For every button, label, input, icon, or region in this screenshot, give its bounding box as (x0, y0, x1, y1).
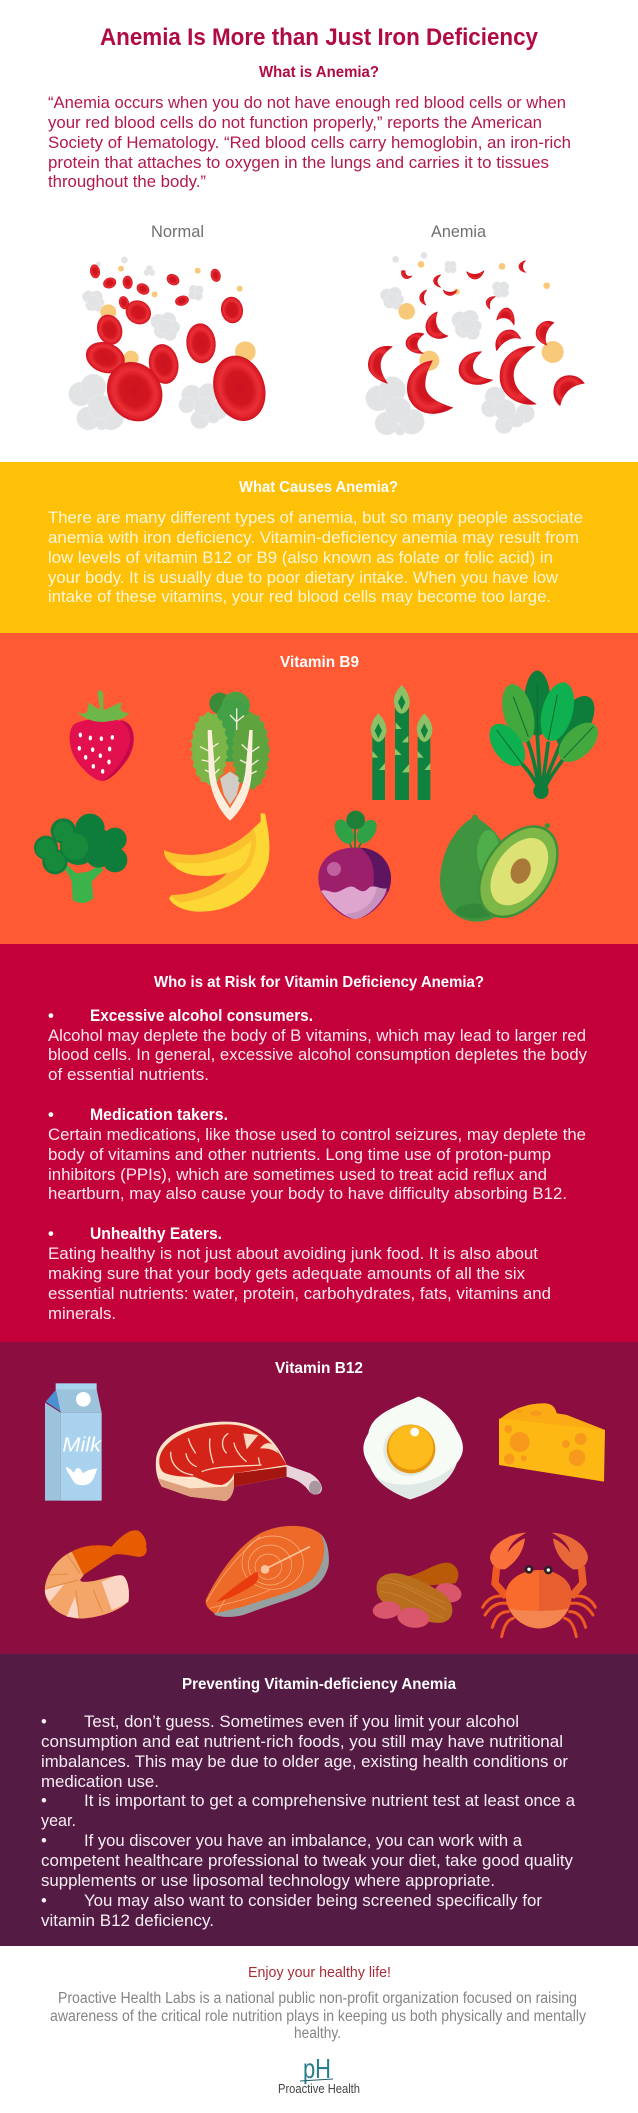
illustration: anemia sickle cells (366, 252, 584, 435)
icon: beet (318, 811, 391, 919)
text block: anemia definition (48, 94, 571, 191)
panel: vitamin B9 foods (0, 633, 638, 944)
text block: medication takers: • (48, 1106, 54, 1124)
text block: excessive alcohol consumers: blood cells. In general, excessive alcohol consumption depletes the body (48, 1046, 588, 1064)
panel: who is at risk (0, 944, 638, 1342)
text block: prevention tips: Test, don’t guess. Sometimes even if you limit your alcohol (84, 1713, 519, 1731)
text block: prevention tips: consumption and eat nutrient-rich foods, you still may have nutritional (41, 1733, 563, 1751)
text block: anemia definition: protein that attaches to oxygen in the lungs and carries it to tissues (48, 154, 549, 172)
text block: unhealthy eaters: essential nutrients: water, protein, carbohydrates, fats, vitamins and (48, 1285, 551, 1303)
text block: anemia definition: Society of Hematology. “Red blood cells carry hemoglobin, an iron-rich (48, 134, 571, 152)
icon: cheese (499, 1403, 605, 1482)
text block: medication takers: heartburn, may also cause your body to have difficulty absorbing B12. (48, 1185, 567, 1203)
heading: vitamin B12: Vitamin B12 (275, 1360, 363, 1377)
food group: right side (363, 1397, 605, 1637)
panel: preventing vitamin-deficiency anemia (0, 1654, 638, 1946)
label: normal: Normal (151, 223, 204, 241)
heading: who is at risk: Who is at Risk for Vitamin Deficiency Anemia? (154, 974, 484, 991)
text block: organization description: Proactive Health Labs is a national public non-profit organization focused on raising (58, 1990, 577, 2007)
tagline: Enjoy your healthy life! (248, 1964, 391, 1981)
text block: organization description (50, 1990, 586, 2042)
text block: prevention tips: supplements or use liposomal technology where appropriate. (41, 1872, 495, 1890)
food group: left column (34, 690, 269, 912)
text block: prevention tips: competent healthcare professional to tweak your diet, take good quality (41, 1852, 574, 1870)
logo: Proactive Health: pH (303, 2053, 331, 2084)
illustration: normal blood cells (69, 257, 274, 432)
icon: steak (156, 1422, 322, 1501)
text block: prevention tips: It is important to get a comprehensive nutrient test at least once a (84, 1792, 576, 1810)
text block: medication takers: Medication takers. (90, 1106, 228, 1124)
icon: avocado (440, 810, 575, 933)
text block: prevention tips (41, 1713, 576, 1930)
text block: anemia definition: throughout the body.” (48, 173, 206, 191)
text block: unhealthy eaters: minerals. (48, 1305, 116, 1323)
text block: prevention tips: year. (41, 1812, 76, 1830)
panel: what causes anemia (0, 462, 638, 633)
icon: crab (483, 1533, 595, 1637)
text block: prevention tips: • (41, 1892, 47, 1910)
panel: what is anemia (0, 0, 638, 462)
text block: excessive alcohol consumers: Alcohol may deplete the body of B vitamins, which may lead to larger red (48, 1027, 586, 1045)
label: anemia: Anemia (431, 223, 487, 241)
icon: strawberry (70, 690, 134, 781)
text block: prevention tips: vitamin B12 deficiency. (41, 1912, 214, 1930)
text block: prevention tips: imbalances. This may be due to older age, existing health conditions or (41, 1753, 569, 1771)
icon: milk carton: Milk (62, 1434, 103, 1457)
logo: Proactive Health: Proactive Health (278, 2082, 360, 2096)
text block: causes: anemia with iron deficiency. Vitamin-deficiency anemia may result from (48, 529, 579, 547)
text block: excessive alcohol consumers: of essential nutrients. (48, 1066, 209, 1084)
title: Anemia Is More than Just Iron Deficiency (100, 24, 539, 51)
icon: milk carton (45, 1383, 103, 1501)
text block: unhealthy eaters: Unhealthy Eaters. (90, 1225, 222, 1243)
icon: broccoli (34, 814, 127, 903)
text block: prevention tips: medication use. (41, 1773, 159, 1791)
text block: medication takers: inhibitors (PPIs), which are sometimes used to treat acid reflux and (48, 1166, 547, 1184)
heading: preventing anemia: Preventing Vitamin-deficiency Anemia (182, 1676, 456, 1693)
text block: causes: There are many different types of anemia, but so many people associate (48, 509, 583, 527)
text block: unhealthy eaters (48, 1225, 551, 1323)
heading: what is anemia: What is Anemia? (259, 64, 379, 81)
text block: excessive alcohol consumers (48, 1007, 588, 1084)
text block: causes: intake of these vitamins, your red blood cells may become too large. (48, 588, 551, 606)
panel: footer (0, 1946, 638, 2113)
text block: medication takers: Certain medications, like those used to control seizures, may deplete the (48, 1126, 586, 1144)
text block: unhealthy eaters: making sure that your body gets adequate amounts of all the six (48, 1265, 526, 1283)
text block: unhealthy eaters: • (48, 1225, 54, 1243)
text block: prevention tips: • (41, 1713, 47, 1731)
panel: vitamin B12 foods (0, 1342, 638, 1654)
text block: causes: your body. It is usually due to poor dietary intake. When you have low (48, 569, 558, 587)
text block: causes (48, 509, 583, 606)
text block: prevention tips: • (41, 1792, 47, 1810)
text block: prevention tips: If you discover you have an imbalance, you can work with a (84, 1832, 523, 1850)
text block: organization description: awareness of the critical role nutrition plays in keeping us both physically and mentally (50, 2008, 586, 2025)
text block: excessive alcohol consumers: Excessive alcohol consumers. (90, 1007, 313, 1025)
text block: organization description: healthy. (294, 2025, 341, 2042)
icon: bananas (164, 813, 269, 912)
text block: excessive alcohol consumers: • (48, 1007, 54, 1025)
food group: right column (318, 671, 605, 933)
text block: medication takers: body of vitamins and other nutrients. Long time use of proton-pump (48, 1146, 551, 1164)
food group: left side (45, 1383, 329, 1619)
heading: what causes anemia: What Causes Anemia? (239, 479, 398, 496)
icon: chard leaves (192, 692, 268, 821)
icon: fried egg (363, 1397, 463, 1499)
text block: medication takers (48, 1106, 586, 1203)
text block: causes: low levels of vitamin B12 or B9 (also known as folate or folic acid) in (48, 549, 553, 567)
text block: prevention tips: • (41, 1832, 47, 1850)
icon: peanuts and beans (372, 1563, 464, 1630)
icon: salmon steak (206, 1526, 329, 1617)
icon: spinach (482, 671, 605, 799)
icon: shrimp (45, 1530, 147, 1619)
icon: asparagus (371, 685, 432, 800)
text block: unhealthy eaters: Eating healthy is not just about avoiding junk food. It is also about (48, 1245, 538, 1263)
text block: prevention tips: You may also want to consider being screened specifically for (84, 1892, 543, 1910)
heading: vitamin B9: Vitamin B9 (280, 654, 359, 671)
text block: anemia definition: your red blood cells do not function properly,” reports the American (48, 114, 542, 132)
logo: Proactive Health (278, 2053, 360, 2096)
text block: anemia definition: “Anemia occurs when you do not have enough red blood cells or when (48, 94, 566, 112)
